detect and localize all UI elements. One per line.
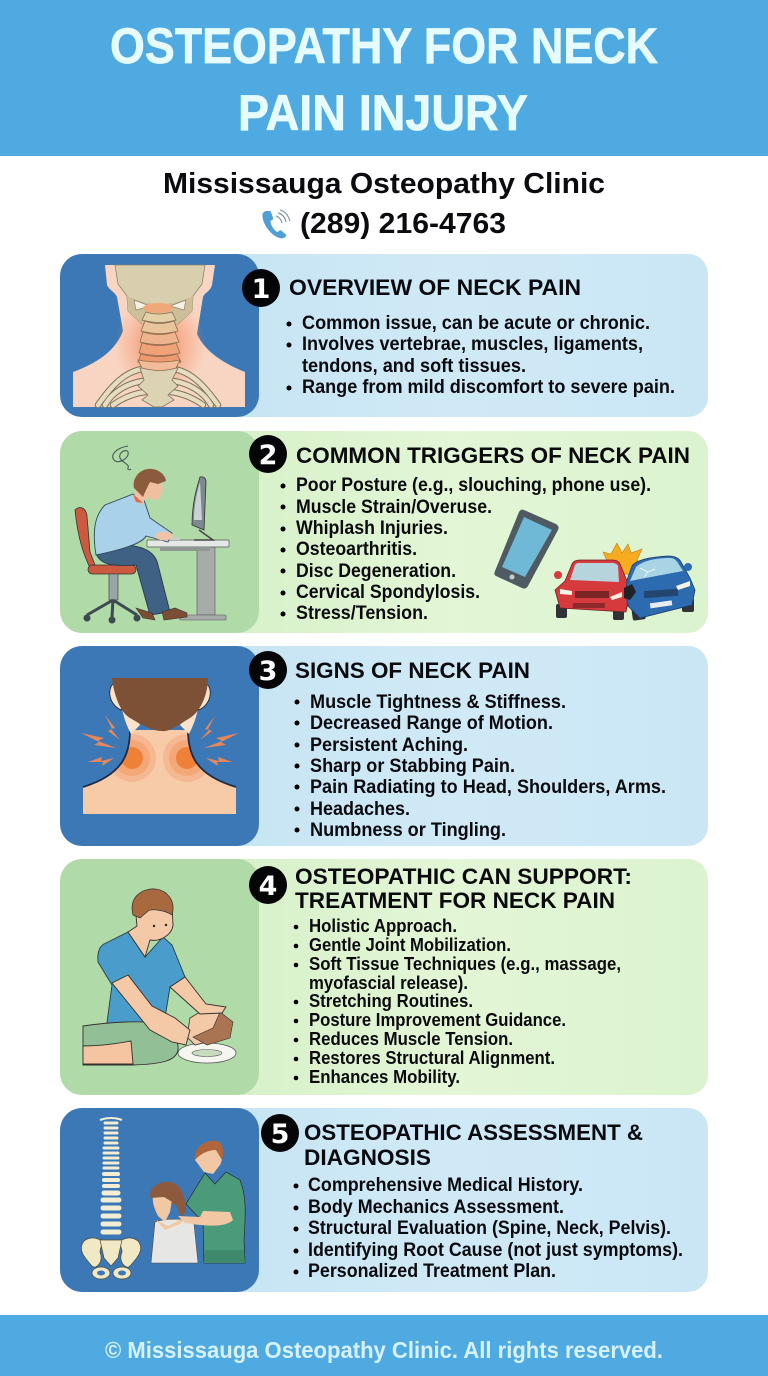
bullet list 2: Stress/Tension. bbox=[296, 602, 428, 624]
bullet list 4: Restores Structural Alignment. bbox=[309, 1047, 555, 1068]
title: OSTEOPATHY FOR NECK bbox=[110, 18, 658, 74]
bullet list 3: Muscle Tightness & Stiffness. bbox=[310, 691, 566, 713]
red car bbox=[554, 560, 630, 620]
heading 4 bbox=[295, 864, 632, 913]
desk bbox=[147, 537, 229, 620]
footer bbox=[0, 1315, 768, 1376]
bullet list 4: Enhances Mobility. bbox=[309, 1066, 460, 1087]
bullet list 3: Sharp or Stabbing Pain. bbox=[310, 755, 515, 777]
title: PAIN INJURY bbox=[238, 85, 528, 141]
bullet list 4: Gentle Joint Mobilization. bbox=[309, 934, 511, 955]
panel 2: common triggers bbox=[60, 431, 708, 633]
patient head bbox=[187, 1009, 223, 1045]
bullet list 3 bbox=[294, 691, 666, 841]
number badge 2 bbox=[249, 435, 287, 473]
pain spots bbox=[114, 734, 206, 782]
illustration: neck with pain spots bbox=[81, 678, 239, 814]
number badge 3: 3 bbox=[259, 656, 277, 687]
bullet list 2: Cervical Spondylosis. bbox=[296, 581, 480, 603]
bullet list 1: tendons, and soft tissues. bbox=[302, 355, 526, 377]
panel 5: assessment and diagnosis bbox=[60, 1108, 708, 1292]
bullet list 2: Muscle Strain/Overuse. bbox=[296, 496, 492, 518]
vertebrae bbox=[138, 312, 181, 370]
icon: car crash bbox=[554, 543, 695, 621]
heading 5 bbox=[304, 1120, 643, 1170]
panel 3: signs of neck pain bbox=[60, 646, 708, 846]
bullet list 3: Persistent Aching. bbox=[310, 734, 468, 756]
illustration: neck and cervical spine bbox=[73, 265, 245, 407]
number badge 2: 2 bbox=[259, 440, 277, 471]
number badge 1 bbox=[242, 269, 280, 307]
heading 4: OSTEOPATHIC CAN SUPPORT: bbox=[295, 864, 632, 889]
bullet list 3: Numbness or Tingling. bbox=[310, 819, 506, 841]
number badge 5: 5 bbox=[271, 1119, 289, 1150]
pillow bbox=[178, 1043, 236, 1063]
panel 1: overview of neck pain bbox=[60, 254, 708, 417]
icon: smartphone bbox=[494, 510, 559, 589]
therapist arm bbox=[178, 1211, 233, 1226]
ribs bbox=[98, 369, 218, 405]
chair bbox=[75, 508, 140, 624]
bullet list 2: Poor Posture (e.g., slouching, phone use). bbox=[296, 474, 651, 496]
hand bbox=[155, 532, 173, 540]
bullet list 1: Involves vertebrae, muscles, ligaments, bbox=[302, 333, 643, 355]
bullet list 1: Range from mild discomfort to severe pain. bbox=[302, 376, 675, 398]
bullet list 3: Headaches. bbox=[310, 798, 410, 820]
blue car bbox=[624, 556, 695, 621]
legs bbox=[96, 545, 170, 615]
illustration: therapist treating patient bbox=[83, 889, 236, 1065]
shirt bbox=[94, 494, 172, 555]
panel 4: osteopathic treatment bbox=[60, 859, 708, 1095]
monitor bbox=[192, 477, 213, 540]
bullet list 4: myofascial release). bbox=[309, 972, 468, 993]
illustration: man slouching at desk bbox=[75, 446, 229, 624]
bullet list 1 bbox=[286, 312, 675, 398]
ears bbox=[110, 684, 125, 710]
number badge 4: 4 bbox=[259, 871, 277, 902]
head bbox=[134, 472, 163, 505]
therapist bbox=[186, 1172, 245, 1263]
number badge 4 bbox=[249, 866, 287, 904]
bullet list 2 bbox=[280, 474, 651, 624]
bullet list 4: Holistic Approach. bbox=[309, 915, 457, 936]
number badge 1: 1 bbox=[252, 274, 270, 305]
heading 5: DIAGNOSIS bbox=[304, 1145, 431, 1170]
copyright text: © Mississauga Osteopathy Clinic. All rights reserved. bbox=[105, 1337, 663, 1363]
shoes bbox=[136, 608, 187, 620]
title bbox=[110, 18, 658, 141]
bullet list 4: Posture Improvement Guidance. bbox=[309, 1009, 566, 1030]
phone number: (289) 216-4763 bbox=[300, 208, 506, 240]
bullet list 4: Stretching Routines. bbox=[309, 990, 473, 1011]
bullet list 5: Comprehensive Medical History. bbox=[308, 1174, 583, 1196]
bullet list 5: Body Mechanics Assessment. bbox=[308, 1196, 564, 1218]
bullet list 1: Common issue, can be acute or chronic. bbox=[302, 312, 650, 334]
heading 4: TREATMENT FOR NECK PAIN bbox=[295, 888, 615, 913]
therapist shirt bbox=[98, 932, 185, 1030]
bullet list 4 bbox=[294, 915, 621, 1087]
heading 1: OVERVIEW OF NECK PAIN bbox=[289, 275, 581, 300]
pain bolts bbox=[81, 715, 239, 766]
bullet list 5: Identifying Root Cause (not just symptoms). bbox=[308, 1239, 683, 1261]
therapist head bbox=[128, 905, 173, 957]
patient body bbox=[83, 1022, 178, 1065]
illustration: spine and pelvis bbox=[81, 1118, 141, 1279]
bullet list 2: Whiplash Injuries. bbox=[296, 517, 448, 539]
hair bbox=[112, 678, 208, 731]
bullet list 2: Disc Degeneration. bbox=[296, 560, 456, 582]
heading 5: OSTEOPATHIC ASSESSMENT & bbox=[304, 1120, 643, 1145]
bullet list 3: Pain Radiating to Head, Shoulders, Arms. bbox=[310, 776, 666, 798]
bullet list 4: Soft Tissue Techniques (e.g., massage, bbox=[309, 953, 621, 974]
bullet list 5 bbox=[294, 1174, 683, 1282]
icon: phone bbox=[262, 210, 290, 238]
bullet list 5: Personalized Treatment Plan. bbox=[308, 1260, 556, 1282]
scribble bbox=[113, 446, 131, 470]
heading 2: COMMON TRIGGERS OF NECK PAIN bbox=[296, 443, 690, 468]
bullet list 2: Osteoarthritis. bbox=[296, 538, 417, 560]
phone contact bbox=[262, 208, 506, 240]
number badge 3 bbox=[249, 651, 287, 689]
bullet list 3: Decreased Range of Motion. bbox=[310, 712, 553, 734]
heading 3: SIGNS OF NECK PAIN bbox=[295, 658, 530, 683]
illustration: therapist assessing patient bbox=[150, 1141, 245, 1263]
clinic name: Mississauga Osteopathy Clinic bbox=[163, 168, 605, 200]
number badge 5 bbox=[261, 1114, 299, 1152]
bullet list 4: Reduces Muscle Tension. bbox=[309, 1028, 513, 1049]
therapist arms bbox=[112, 975, 190, 1045]
woman bbox=[151, 1219, 198, 1263]
bullet list 5: Structural Evaluation (Spine, Neck, Pelvis). bbox=[308, 1217, 671, 1239]
header banner bbox=[0, 0, 768, 156]
